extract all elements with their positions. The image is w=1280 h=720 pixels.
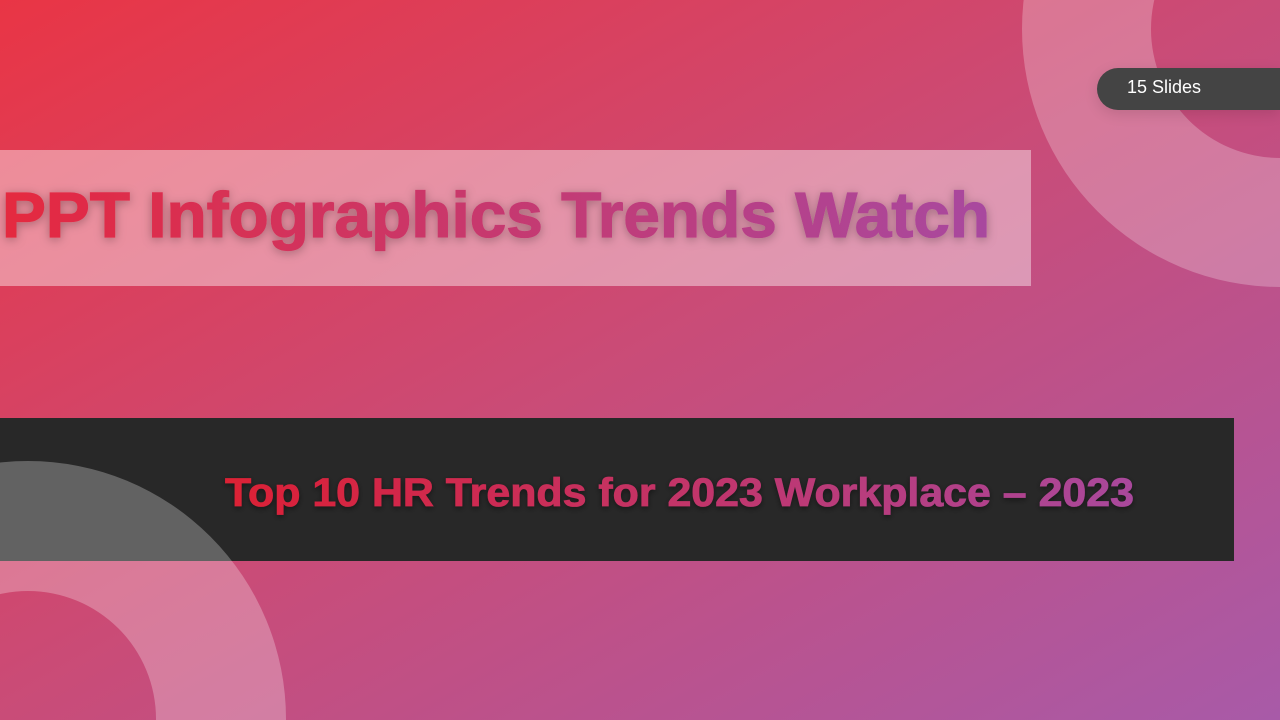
subtitle: Top 10 HR Trends for 2023 Workplace – 2023 xyxy=(225,471,1134,515)
title: PPT Infographics Trends Watch xyxy=(2,179,990,251)
title band xyxy=(0,150,1031,286)
slide count pill: 15 Slides xyxy=(1127,77,1201,97)
dark subtitle band xyxy=(0,418,1234,561)
decorative ring: bottom left xyxy=(0,461,286,720)
decorative ring: top right xyxy=(1022,0,1280,287)
slide count pill xyxy=(1097,68,1280,110)
